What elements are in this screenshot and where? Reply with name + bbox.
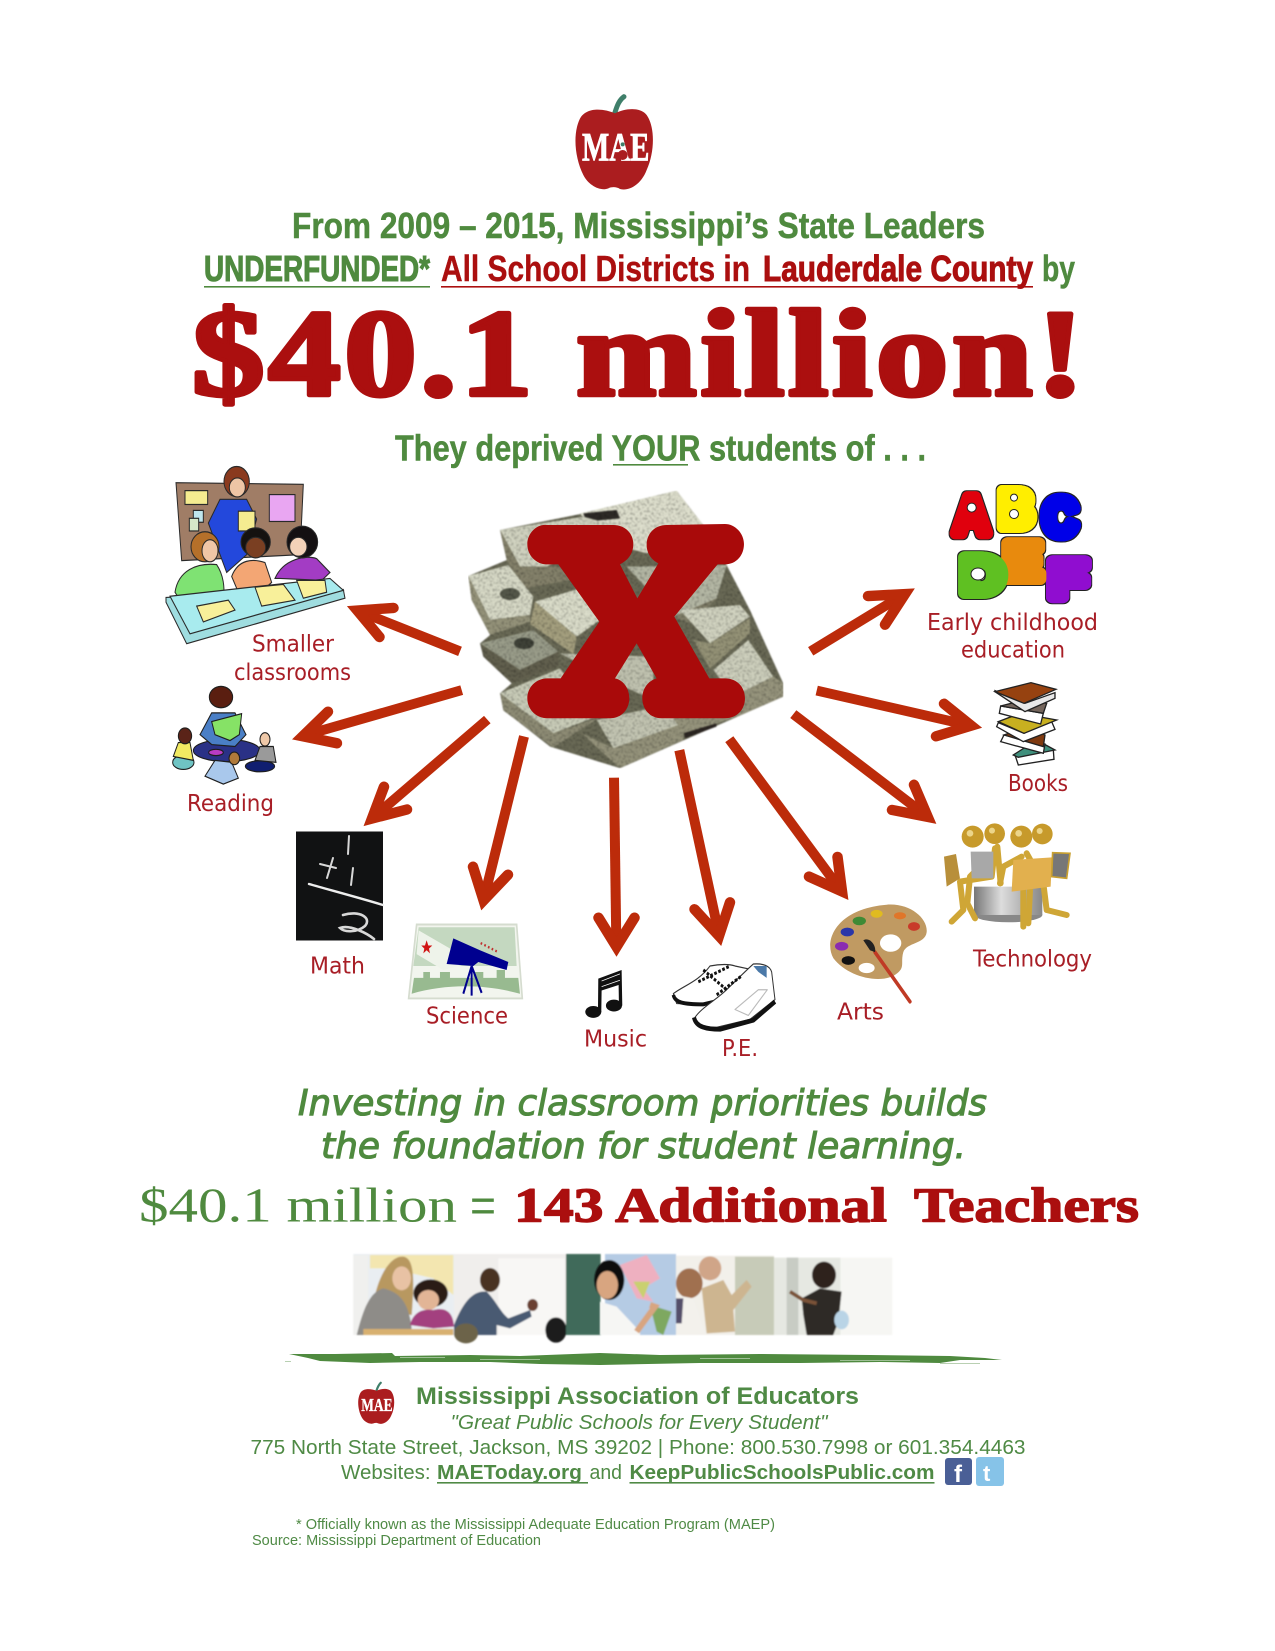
heading line 2 — [204, 248, 1075, 289]
statement text — [298, 1083, 987, 1167]
arrow: to music — [598, 778, 634, 947]
label: smaller classrooms — [234, 632, 351, 686]
label: P.E.: P.E. — [722, 1036, 758, 1062]
icon: ABC DEF bubble letters: B — [999, 481, 1034, 539]
icon: ABC DEF bubble letters — [954, 481, 1087, 609]
label: books: Books — [1008, 771, 1068, 797]
statement text: the foundation for student learning. — [321, 1126, 966, 1167]
icon: twitter — [976, 1457, 1004, 1486]
statement text: Investing in classroom priorities builds — [298, 1083, 987, 1124]
heading line 2: UNDERFUNDED* — [204, 248, 430, 289]
arrow: to science — [473, 736, 524, 900]
icon: ABC DEF bubble letters: C — [1043, 489, 1077, 547]
photo strip: teachers in classrooms — [353, 1254, 892, 1343]
label: technology: Technology — [972, 947, 1092, 973]
footnote: Source: Mississippi Department of Education — [252, 1533, 541, 1549]
icon: twitter: t — [983, 1461, 991, 1486]
logo: MAE apple — [575, 97, 653, 189]
icon: facebook — [945, 1458, 972, 1488]
arrow: to smaller classrooms — [357, 608, 460, 651]
arrow: to arts — [729, 739, 842, 891]
icon: facebook: f — [954, 1461, 963, 1488]
footer: address: 775 North State Street, Jackson, MS 39202 | Phone: 800.530.7998 or 601.354.4463 — [250, 1437, 1026, 1459]
icon: ABC DEF bubble letters: A — [954, 487, 989, 545]
icon: ABC DEF bubble letters: F — [1049, 551, 1087, 609]
label: music: Music — [584, 1026, 647, 1052]
icon: ABC DEF bubble letters: E — [1004, 533, 1042, 591]
footer: websites: Websites: — [341, 1462, 431, 1484]
label: arts: Arts — [837, 1000, 884, 1026]
heading line 1: From 2009 – 2015, Mississippi’s State Leaders — [292, 205, 985, 246]
footer: websites: KeepPublicSchoolsPublic.com — [630, 1462, 934, 1484]
red X — [527, 524, 745, 718]
icon: reading — [173, 686, 276, 784]
icon: pile of money crossed out with red X — [468, 491, 783, 768]
heading line 2: Lauderdale County — [763, 248, 1033, 289]
heading line 2: by — [1042, 248, 1075, 289]
footer: websites — [341, 1462, 934, 1484]
label: smaller classrooms: Smaller — [252, 632, 334, 658]
arrow: to reading — [303, 690, 462, 743]
label: science: Science — [426, 1004, 508, 1030]
label: reading: Reading — [187, 791, 274, 817]
logo: MAE apple: MAE — [582, 124, 649, 169]
footnote: * Officially known as the Mississippi Adequate Education Program (MAEP) — [296, 1517, 775, 1533]
arrow: to math — [372, 720, 487, 819]
equation: $40.1 million = 143 additional teachers: $40.1 million — [139, 1178, 457, 1233]
icon: ABC DEF bubble letters: D — [961, 547, 1004, 605]
equation: $40.1 million = 143 additional teachers — [139, 1178, 1139, 1233]
footer: slogan: "Great Public Schools for Every Student" — [450, 1412, 828, 1434]
icon: technology gold figures — [944, 823, 1070, 927]
icon: smaller classrooms — [166, 466, 345, 644]
subheading: They deprived YOUR students of . . . — [395, 428, 926, 468]
footer: websites: and — [590, 1462, 622, 1484]
icon: art palette — [830, 905, 927, 1002]
headline amount: $40.1 million! — [192, 285, 1088, 422]
small MAE logo — [358, 1383, 394, 1424]
footnote — [252, 1517, 775, 1549]
equation: $40.1 million = 143 additional teachers: 143 Additional — [514, 1178, 887, 1233]
label: smaller classrooms: classrooms — [234, 660, 351, 686]
arrows from money to each item — [303, 594, 971, 947]
icon: sneakers — [673, 964, 775, 1029]
small MAE logo: MAE — [361, 1396, 393, 1415]
label: early childhood education: education — [961, 638, 1065, 664]
footer: websites: MAEToday.org — [437, 1462, 582, 1484]
brush stroke divider — [285, 1353, 1002, 1365]
equation: $40.1 million = 143 additional teachers: Teachers — [914, 1178, 1139, 1233]
equation: $40.1 million = 143 additional teachers: = — [470, 1180, 496, 1232]
arrow: to books — [817, 691, 971, 736]
arrow: to early childhood — [811, 594, 905, 651]
arrow: to technology — [793, 714, 928, 817]
icon: science telescope — [409, 924, 522, 998]
label: early childhood education: Early childhood — [927, 610, 1098, 636]
heading line 2: All School Districts in — [441, 248, 750, 289]
icon: stack of books — [995, 683, 1057, 765]
footer: organization name: Mississippi Association of Educators — [416, 1383, 859, 1410]
arrow: to P.E. — [679, 750, 730, 936]
label: math: Math — [310, 953, 365, 979]
icon: music note — [585, 970, 622, 1018]
label: early childhood education — [927, 610, 1098, 664]
icon: chalkboard math — [296, 832, 383, 940]
